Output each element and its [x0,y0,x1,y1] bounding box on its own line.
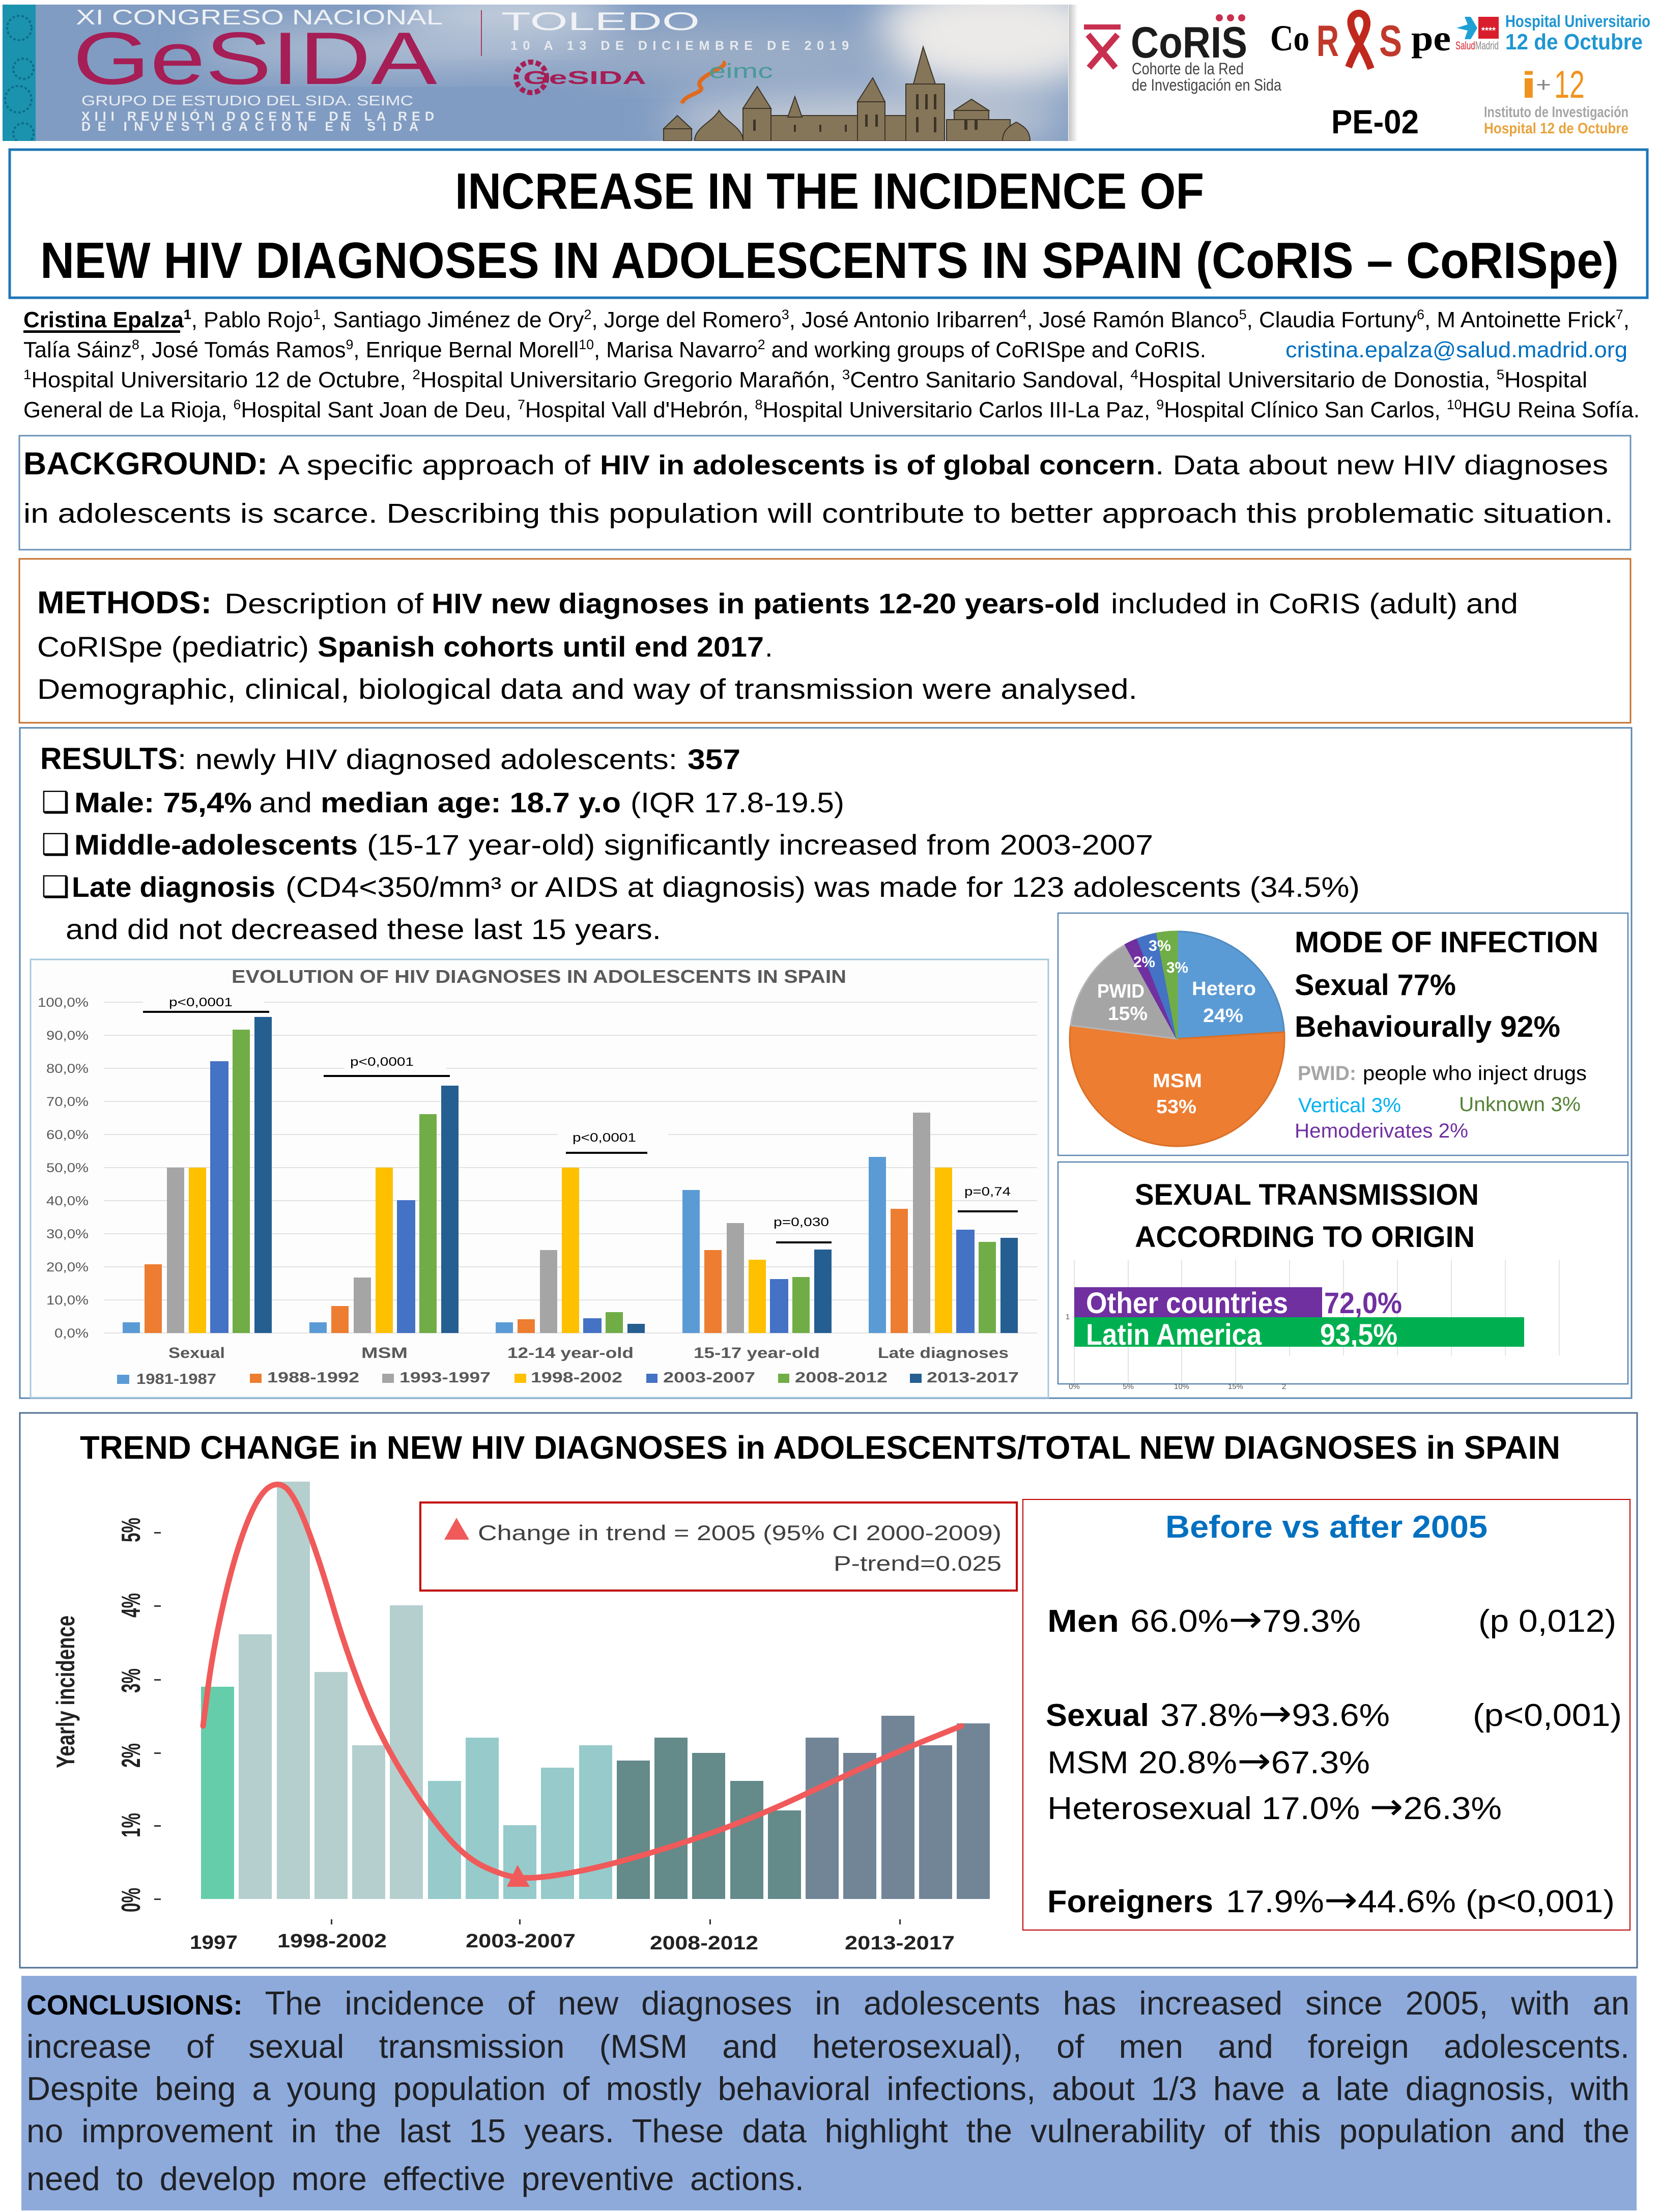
bullet: late diagnosis: ❑ [41,869,70,904]
bullet: middle adolescents: Middle-adolescents [74,829,358,861]
pie notes: people who inject drugs [1363,1062,1587,1085]
bullet: late diagnosis [41,869,1360,945]
text block: authors and affiliations: General de La Rioja, [23,398,229,422]
pie labels: 2% [1133,954,1155,971]
text block: authors and affiliations: 4 [1019,307,1026,322]
text block: authors and affiliations: 9 [1156,397,1164,412]
text block: authors and affiliations: 10 [1447,397,1462,412]
text block: authors and affiliations: 1 [184,307,191,322]
pie notes [1295,1062,1587,1142]
bullet: male and median age: ❑ [41,785,70,819]
axis tick labels: 0% [1069,1382,1080,1391]
y axis labels: 5% [117,1518,146,1542]
stat: behaviourally 92%: Behaviourally 92% [1295,1010,1560,1043]
logo: i+12 Instituto de Investigacion [1484,63,1628,137]
panel: background: . Data about new HIV diagnoses [1155,450,1608,480]
panel: methods: included in CoRIS (adult) and [1111,587,1518,619]
subtitle: Grupo de Estudio: GRUPO DE ESTUDIO DEL SIDA. SEIMC [81,93,413,108]
bullet: middle adolescents [41,827,1153,862]
text block: authors and affiliations: cristina.epalza@salud.madrid.org [1285,337,1627,362]
axis tick labels: 1 [1066,1313,1070,1321]
row: men [1047,1598,1616,1640]
logo: CoRIS [1084,14,1281,94]
y axis labels: 50,0% [46,1161,89,1175]
text block: authors and affiliations: 3 [842,367,850,382]
x axis labels: 2013-2017 [845,1933,955,1954]
panel: methods: Spanish cohorts until end 2017 [318,631,764,663]
banner: congress header [3,5,1068,141]
text block: authors and affiliations: 10 [579,337,594,352]
pie labels: 15% [1108,1003,1148,1025]
text block: authors and affiliations: and working groups of CoRISpe and CoRIS. [765,337,1206,362]
pie labels: 24% [1203,1005,1243,1027]
bars: 12-14 year-old [496,1168,645,1333]
logo: i+12 Instituto de Investigacion: i [1521,65,1537,106]
bars: sexual [123,1017,272,1333]
panel: background [19,436,1631,550]
chart legend [117,1370,1019,1387]
bullet: late diagnosis: Late diagnosis [72,871,275,903]
y axis labels: 20,0% [46,1260,89,1274]
logo: CoRIS: CoRIS [1131,18,1247,67]
panel: conclusions: increase of sexual transmission (MSM and heterosexual), of men and foreign adolescents. [26,2028,1629,2065]
x axis labels [190,1931,955,1954]
heading: Toledo: TOLEDO [501,7,700,36]
bullet: middle adolescents: (15-17 year-old) significantly increased from 2003-2007 [367,829,1153,861]
text block: authors and affiliations: Hospital Sant Joan de Deu, [241,398,518,422]
pie notes: Vertical 3% [1298,1094,1401,1117]
text block: authors and affiliations: , Marisa Navarro [594,337,758,362]
row: men: 66.0%→79.3% [1130,1598,1361,1640]
stat: sexual 77%: Sexual 77% [1295,969,1456,1002]
pie labels: MSM [1153,1070,1202,1092]
text block: authors and affiliations: Hospital Vall d'Hebrón, [525,398,755,422]
text block: authors and affiliations: , Claudia Fortuny [1247,307,1417,332]
logo: Hospital Universitario 12 de Octubre: SaludMadrid [1455,39,1499,52]
row: men: Men [1047,1604,1119,1639]
text block: authors and affiliations: 7 [1616,307,1623,322]
text block: authors and affiliations: , José Antonio Iribarren [789,307,1019,332]
text block: authors and affiliations: Hospital Clínico San Carlos, [1164,398,1447,422]
panel: background: A specific approach of [278,450,591,480]
subtitle: Reunion docente: XIII REUNIÓN DOCENTE DE LA RED [81,108,434,124]
bullet: male and median age [41,785,844,819]
panel: methods [19,559,1631,723]
text block: authors and affiliations: , M Antoinette Frick [1424,307,1616,332]
logo: CoRIS: de Investigación en Sida [1132,76,1281,94]
change point marker [507,1865,530,1887]
y axis labels: 60,0% [46,1128,89,1142]
title line 1: INCREASE IN THE INCIDENCE OF [455,163,1204,220]
pie notes: Hemoderivates 2% [1295,1120,1468,1142]
pie notes: Unknown 3% [1459,1093,1581,1116]
x axis labels: 2008-2012 [650,1933,758,1954]
p-value annotations: p<0,0001 [350,1055,414,1069]
logo: Hospital Universitario 12 de Octubre: ★★★★ [1481,26,1496,32]
callout: change in trend [420,1502,1017,1591]
row: sexual: 37.8%→93.6% [1160,1692,1390,1735]
text block: authors and affiliations: 6 [234,397,241,412]
bullet: middle adolescents: ❑ [41,827,70,862]
y axis labels: 1% [117,1813,146,1837]
bars: 15-17 year-old [682,1190,832,1333]
category labels: 15-17 year-old [694,1345,820,1362]
y axis labels: 30,0% [46,1227,89,1241]
logo: CoRISpe: Co [1270,18,1309,59]
bar: other countries [1074,1287,1402,1320]
y axis labels: 40,0% [46,1194,89,1208]
panel: conclusions: no improvement in the last 15 years. These data highlight the vulnerability of this population and the [26,2112,1629,2149]
text block: authors and affiliations: 9 [346,337,353,352]
bar: latin america: Latin America [1086,1318,1262,1351]
y axis ticks [154,1532,901,1924]
heading line 2: ACCORDING TO ORIGIN [1135,1221,1475,1254]
panel: methods: Description of [224,587,423,619]
panel: mode of infection [1058,913,1628,1155]
bar: latin america [1074,1317,1524,1351]
row: men: (p 0,012) [1478,1604,1616,1639]
panel: background: in adolescents is scarce. Describing this population will contribute to better approach this problematic situation. [23,498,1613,529]
text block: authors and affiliations: , Enrique Bernal Morell [353,337,579,362]
panel: conclusions: CONCLUSIONS: The incidence of new diagnoses in adolescents has increased since 2005, with an [26,1984,1629,2022]
logo: GeSIDA gear: GeSIDA [523,67,646,88]
y axis labels: 90,0% [46,1029,89,1043]
y axis labels: 10,0% [46,1293,89,1308]
text block: authors and affiliations: 5 [1239,307,1247,322]
panel: results: : newly HIV diagnosed adolescents: [178,743,677,775]
y axis labels: 80,0% [46,1062,89,1076]
text block: authors and affiliations: , José Ramón Blanco [1026,307,1239,332]
logo: CoRISpe: S [1379,17,1402,66]
logo: Hospital Universitario 12 de Octubre: 12 de Octubre [1505,30,1643,54]
heading: XI Congreso Nacional: XI CONGRESO NACIONAL [76,5,443,29]
logo: Hospital Universitario 12 de Octubre [1455,12,1650,54]
text block: authors and affiliations: 6 [1417,307,1424,322]
panel: background: HIV in adolescents is of global concern [600,450,1155,480]
chart title: EVOLUTION OF HIV DIAGNOSES IN ADOLESCENTS IN SPAIN [232,966,846,987]
callout: change in trend: P-trend=0.025 [834,1551,1002,1575]
logo: CoRISpe: pe [1411,18,1451,59]
text block: authors and affiliations: 8 [132,337,139,352]
bullet: late diagnosis: (CD4<350/mm³ or AIDS at diagnosis) was made for 123 adolescents (34.5%) [285,871,1360,903]
trend bar chart [201,1482,990,1899]
p-value annotations: p=0,74 [964,1185,1011,1199]
text block: authors and affiliations: Hospital Universitario de Donostia, [1138,367,1497,392]
chart legend: 1998-2002 [531,1370,622,1386]
text block: authors and affiliations: 8 [755,397,762,412]
methods heading: METHODS: [37,585,212,620]
trend curve [203,1484,961,1878]
x axis labels: 1998-2002 [277,1931,387,1952]
p-value annotations: p=0,030 [774,1215,829,1229]
chart legend: 2013-2017 [927,1370,1019,1386]
panel: methods: Demographic, clinical, biological data and way of transmission were analysed. [37,673,1137,705]
logo: i+12 Instituto de Investigacion: 12 [1554,63,1585,106]
panel: evolution bar chart [31,959,1048,1398]
trend heading: TREND CHANGE in NEW HIV DIAGNOSES in ADOLESCENTS/TOTAL NEW DIAGNOSES in SPAIN [80,1429,1560,1466]
category labels: Sexual [168,1345,225,1362]
x axis labels: 1997 [190,1932,238,1953]
logo: CoRISpe [1270,13,1451,69]
pie labels: 3% [1166,959,1188,976]
category labels [168,1345,1009,1362]
text block: authors and affiliations [23,307,1640,422]
text block: authors and affiliations: , [1623,307,1629,332]
background heading: BACKGROUND: [23,446,268,481]
chart legend: 2003-2007 [663,1370,755,1386]
pie labels: 3% [1149,938,1171,954]
axis tick labels [1066,1313,1286,1391]
poster code: PE-02 [1331,103,1419,140]
pie notes: PWID: [1298,1062,1356,1085]
logo: i+12 Instituto de Investigacion: Hospital 12 de Octubre [1484,120,1628,137]
bar: other countries: 72,0% [1324,1287,1402,1320]
logo text: GeSIDA: GeSIDA [73,17,438,100]
row: foreigners: 17.9%→44.6% (p<0,001) [1226,1878,1615,1921]
text block: authors and affiliations: 2 [584,307,591,322]
category labels: Late diagnoses [878,1345,1009,1362]
panel: trend change [20,1413,1637,1968]
logo: GeSIDA gear [516,62,646,93]
pie chart [1070,931,1284,1146]
row: foreigners: Foreigners [1047,1884,1213,1919]
results heading: RESULTS [40,742,178,776]
axis tick labels: 15% [1228,1382,1243,1391]
panel: results: 357 [688,743,740,775]
row: sexual: Sexual [1046,1698,1149,1733]
event dates: 10 A 13 DE DICIEMBRE DE 2019 [510,39,849,53]
panel: sexual transmission by origin [1058,1162,1628,1391]
panel: methods: CoRISpe (pediatric) [37,631,309,663]
text block: authors and affiliations: 2 [758,337,765,352]
panel: title [10,150,1647,298]
panel: methods: . [765,631,773,663]
panel: methods: HIV new diagnoses in patients 12-20 years-old [432,587,1100,619]
panel: conclusions [21,1976,1637,2210]
y axis labels: 0,0% [54,1326,89,1341]
y axis title: Yearly incidence [51,1615,80,1768]
text block: authors and affiliations: 3 [782,307,789,322]
p-value annotations [143,996,1018,1243]
chart legend: 1981-1987 [136,1371,216,1387]
mode of infection heading: MODE OF INFECTION [1295,926,1598,959]
axis tick labels: 5% [1123,1382,1134,1391]
text block: authors and affiliations: HGU Reina Sofía. [1462,398,1640,422]
p-value annotations: p<0,0001 [573,1131,636,1145]
logo: CoRISpe: R [1317,17,1339,66]
text block: authors and affiliations: Cristina Epalza [23,307,184,332]
logo: CoRIS: Cohorte de la Red [1132,60,1244,78]
bars: late diagnoses [869,1113,1018,1333]
subtitle: De investigacion: DE INVESTIGACIÓN EN SIDA [81,119,418,134]
logo: i+12 Instituto de Investigacion: + [1536,74,1551,96]
y axis labels: 4% [117,1593,146,1618]
row: foreigners [1047,1878,1615,1921]
y axis labels: 3% [117,1668,146,1693]
row: sexual [1046,1692,1622,1735]
text block: authors and affiliations: 7 [518,397,525,412]
text block: authors and affiliations: , Pablo Rojo [191,307,313,332]
y axis labels [38,996,89,1341]
pie labels: PWID [1097,981,1145,1002]
logo: SEIMC: eimc [709,60,773,82]
bullet: late diagnosis: and did not decreased these last 15 years. [66,913,661,945]
p-value annotations: p<0,0001 [169,996,233,1009]
y axis labels: 70,0% [46,1095,89,1109]
panel: before vs after 2005 [1023,1499,1630,1930]
before vs after heading: Before vs after 2005 [1165,1510,1488,1545]
pie labels: 53% [1156,1096,1196,1118]
bullet: male and median age: median age: 18.7 y.o [321,786,621,818]
text block: authors and affiliations: 1 [313,307,321,322]
axis tick labels: 2 [1282,1382,1286,1391]
axis tick labels: 10% [1174,1382,1189,1391]
text block: authors and affiliations: 2 [412,367,420,382]
text block: authors and affiliations: Talía Sáinz [23,337,133,362]
bullet: male and median age: Male: 75,4% [74,786,252,818]
text block: authors and affiliations: Hospital [1504,367,1587,392]
text block: authors and affiliations: 1 [23,367,31,382]
pie labels [1097,938,1256,1118]
panel: conclusions: need to develop more effective preventive actions. [26,2160,804,2197]
text block: authors and affiliations: Hospital Universitario Carlos III-La Paz, [762,398,1156,422]
row: MSM: MSM 20.8% →67.3% [1047,1739,1370,1782]
heading: SEXUAL TRANSMISSION [1135,1178,1479,1211]
text block: authors and affiliations: , Jorge del Romero [591,307,782,332]
chart legend: 2008-2012 [795,1370,888,1386]
text block: authors and affiliations: Centro Sanitario Sandoval, [850,367,1130,392]
text block: authors and affiliations: Hospital Universitario Gregorio Marañón, [420,367,842,392]
chart legend: 1993-1997 [399,1370,491,1386]
y axis labels: 2% [117,1743,146,1768]
row: heterosexual: Heterosexual 17.0% →26.3% [1047,1785,1502,1828]
text block: authors and affiliations: , José Tomás Ramos [139,337,346,362]
y axis labels: 100,0% [38,996,89,1010]
category labels: MSM [361,1345,408,1362]
text block: authors and affiliations: 5 [1497,367,1504,382]
chart legend: 1988-1992 [267,1370,359,1386]
pie labels: Hetero [1192,978,1256,1000]
text block: authors and affiliations: , Santiago Jiménez de Ory [321,307,584,332]
bar: other countries: Other countries [1086,1287,1288,1320]
bars: MSM [309,1086,459,1333]
text block: authors and affiliations: 4 [1130,367,1138,382]
panel: conclusions: Despite being a young population of mostly behavioral infections, about 1/3 have a late diagnosis, with [26,2070,1629,2107]
x axis labels: 2003-2007 [466,1931,576,1952]
logo: SEIMC [682,60,773,103]
category labels: 12-14 year-old [507,1345,634,1362]
row: sexual: (p<0,001) [1473,1698,1622,1733]
bullet: male and median age: (IQR 17.8-19.5) [631,786,844,818]
y axis labels: 0% [117,1888,146,1912]
y axis labels [117,1518,146,1912]
bar: latin america: 93,5% [1320,1318,1397,1351]
panel: results [20,728,1632,1398]
callout: change in trend: Change in trend = 2005 (95% CI 2000-2009) [478,1521,1002,1545]
text block: authors and affiliations: Hospital Universitario 12 de Octubre, [31,367,412,392]
illustration: Toledo alcazar skyline [664,47,1030,141]
bullet: male and median age: and [259,786,312,818]
